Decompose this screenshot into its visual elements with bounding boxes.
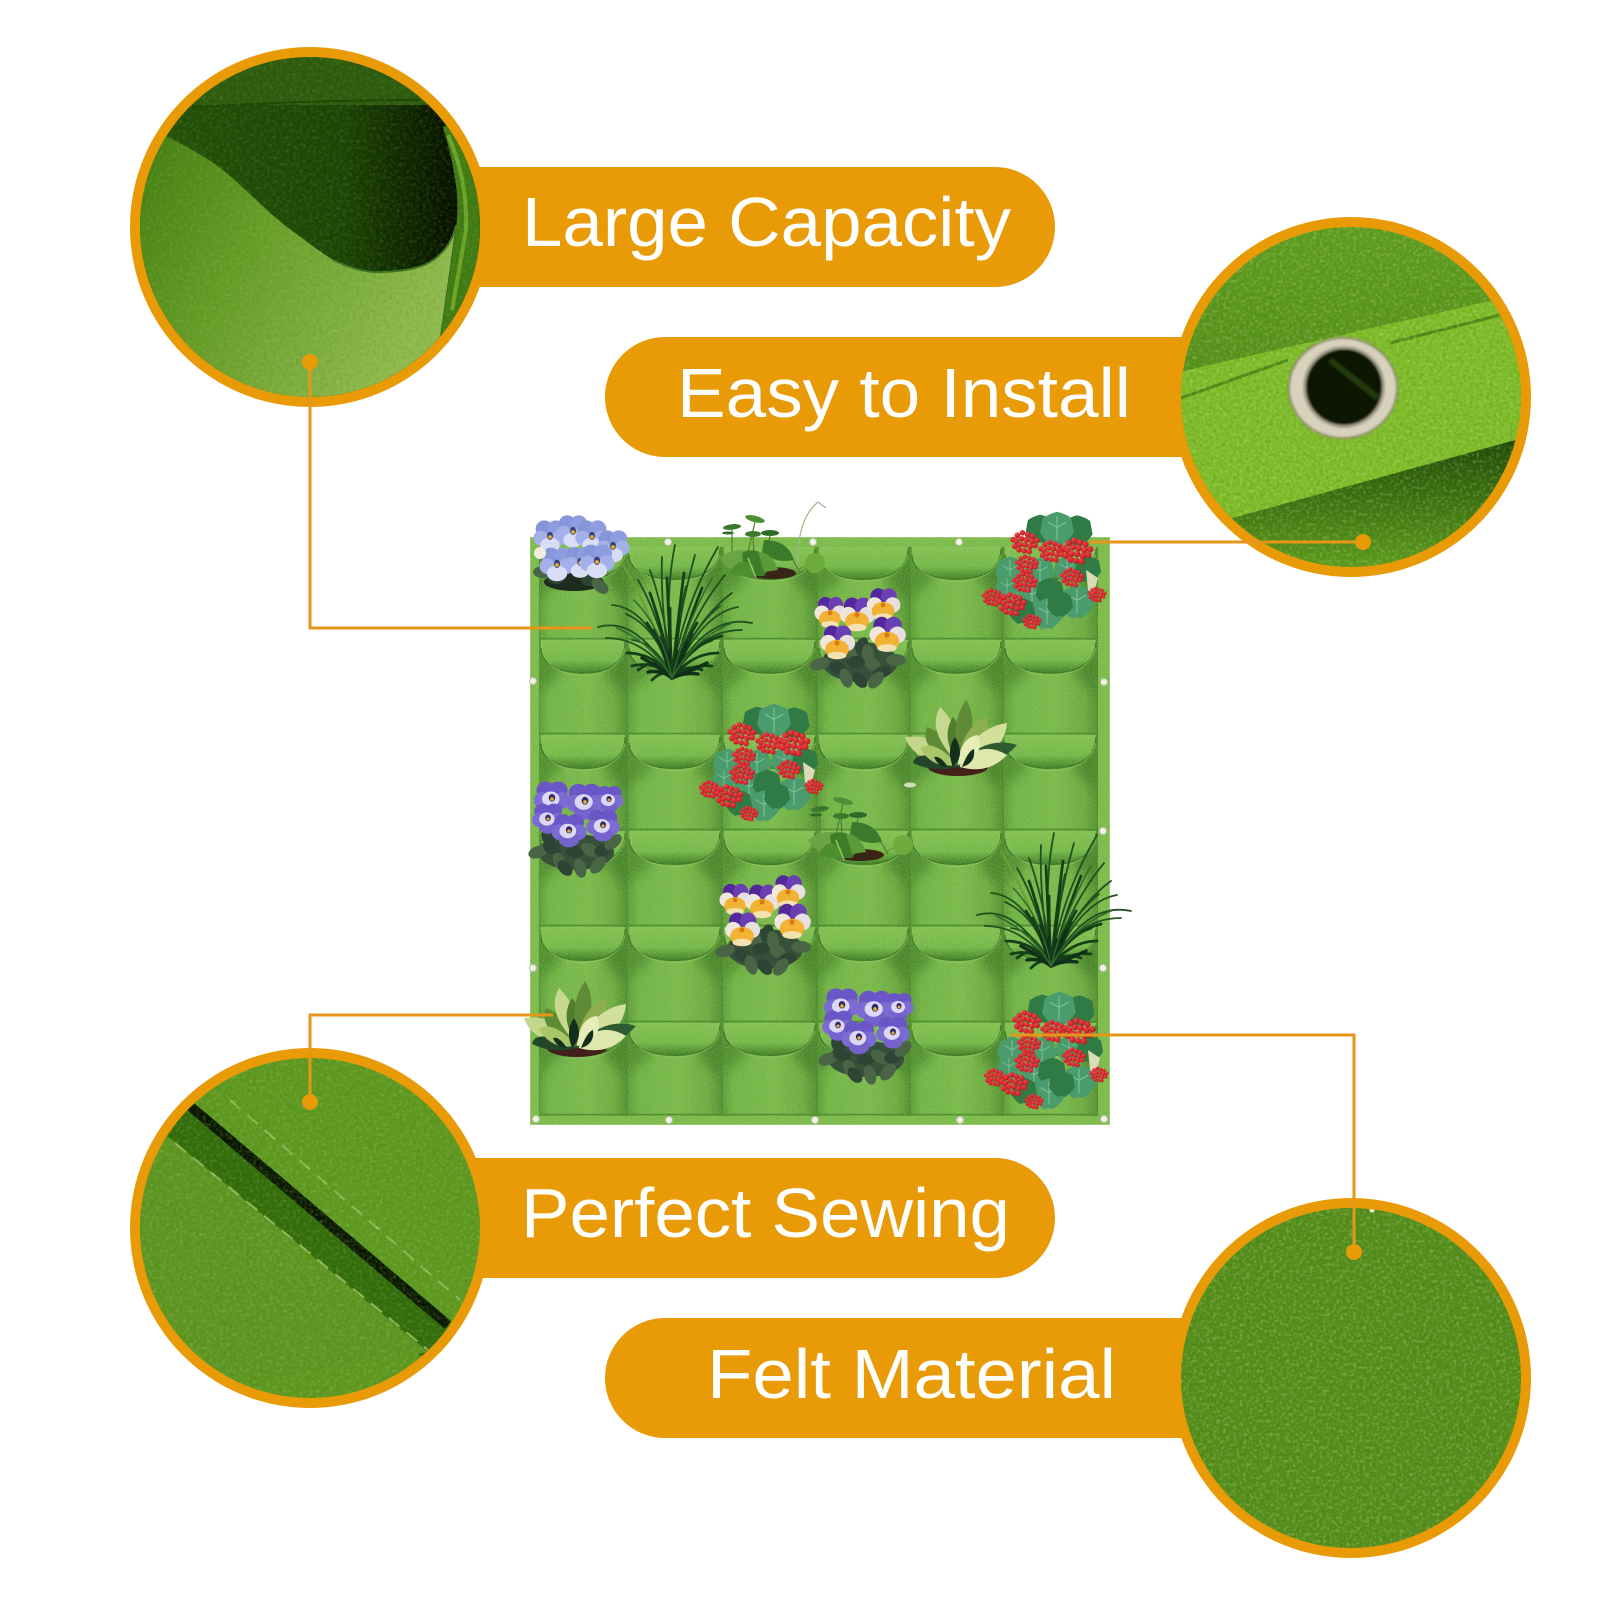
plant: hosta lower left [524,981,636,1057]
grommets [530,538,1108,1124]
feature pill: Perfect Sewing [470,1158,1055,1278]
plant: yellow pansies lower [714,875,811,979]
icon: grommet [1289,338,1397,438]
detail circle: felt material [1171,1198,1531,1558]
label: Large Capacity: Large Capacity [522,183,1011,261]
feature pill: Large Capacity [470,167,1055,287]
plant: yellow pansies upper [809,588,906,692]
feature pill: Felt Material [605,1318,1195,1438]
plant: grass right [977,833,1131,968]
plant: purple pansies left [527,782,625,879]
pocket grid [539,547,1098,1116]
plant: red berries top right [982,512,1107,629]
felt texture [530,537,1110,1125]
panel: felt wall planter [530,537,1110,1125]
label: Easy to Install: Easy to Install [677,354,1131,432]
detail circle: large pocket capacity [130,47,490,407]
plant: sprout middle [808,782,916,861]
plant: red berries bottom right [984,992,1109,1109]
plant: red berries middle [699,704,824,821]
feature pill: Easy to Install [605,337,1195,457]
connector: Large Capacity to pocket [302,354,592,628]
detail circle: sewing seam [130,1048,490,1408]
connector: Felt Material to pocket [1011,1035,1362,1260]
label: Perfect Sewing: Perfect Sewing [521,1174,1010,1252]
plant: purple pansies bottom [817,988,915,1086]
plant: sprout top [720,502,826,579]
plant: grass top [598,545,752,680]
plant: blue pansies [533,515,630,597]
connector: Easy to Install to grommet [1090,534,1371,550]
connector: Perfect Sewing to seam [302,1015,553,1110]
detail circle: metal grommet [1170,217,1531,577]
label: Felt Material: Felt Material [707,1335,1116,1413]
plant: hosta middle [905,700,1017,776]
